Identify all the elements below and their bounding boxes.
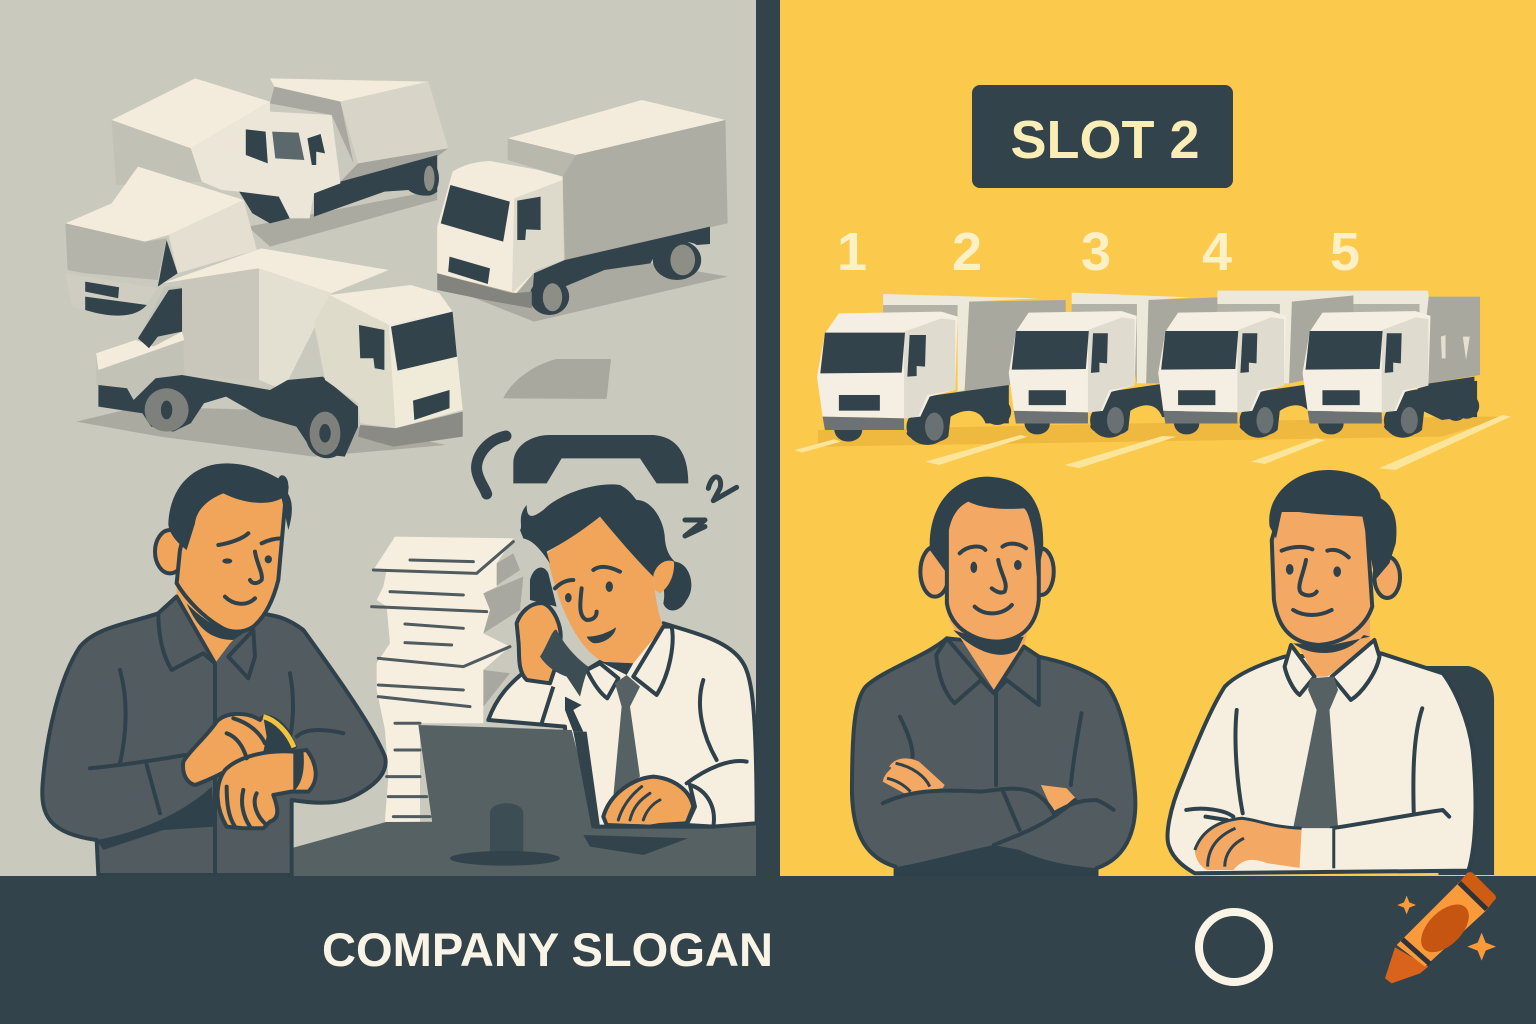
- label box: slot 2: [972, 85, 1233, 188]
- shirt folds: [90, 665, 343, 875]
- parking lines: [795, 415, 1511, 470]
- shirt: [852, 638, 1135, 875]
- face: [947, 497, 1039, 642]
- neck: [949, 620, 1030, 693]
- slot numbers 1 to 5: 4: [1202, 222, 1232, 282]
- panel: chaotic side background: [0, 0, 756, 876]
- upper hand: [183, 714, 295, 785]
- panel: organised side background: [780, 0, 1536, 876]
- neck: [1289, 607, 1370, 677]
- hand holding phone: [517, 603, 561, 683]
- shirt: [1168, 653, 1476, 873]
- slot numbers 1 to 5: 2: [952, 222, 982, 282]
- shirt: [488, 623, 757, 827]
- slot numbers 1 to 5: 1: [837, 222, 867, 282]
- office chair: [1426, 666, 1494, 875]
- facial features: [218, 533, 282, 604]
- shirt folds: [1186, 708, 1449, 828]
- ear: [155, 530, 185, 573]
- watch: [263, 717, 295, 752]
- truck 3: [1158, 291, 1354, 438]
- slot numbers 1 to 5: 5: [1330, 222, 1360, 282]
- hair: [1269, 470, 1396, 580]
- icon: telephone handset: [513, 435, 688, 483]
- man with crossed arms: [852, 477, 1135, 875]
- computer monitor: [418, 725, 688, 866]
- company slogan: COMPANY SLOGAN: [322, 923, 773, 976]
- face: [177, 487, 287, 632]
- shirt folds: [900, 693, 1082, 785]
- truck: back left: [112, 78, 448, 247]
- man checking his watch: [42, 463, 386, 875]
- truck shadow: [818, 417, 1507, 447]
- panel divider: [756, 0, 780, 876]
- truck: front centre: [76, 248, 463, 458]
- man in shirt and tie: [1168, 470, 1476, 873]
- face: [1272, 510, 1372, 645]
- crossed arms: [883, 789, 1114, 845]
- icon: orange crayon with sparkles: [1385, 872, 1496, 983]
- tie: [1293, 677, 1338, 828]
- truck 2: [1009, 293, 1217, 438]
- hands: [883, 758, 945, 793]
- facial features: [1282, 547, 1349, 615]
- truck 4: [1303, 291, 1480, 438]
- neck: [177, 577, 263, 663]
- ears: [920, 547, 949, 597]
- lower hand: [218, 750, 316, 828]
- label box: slot 2: SLOT 2: [1010, 110, 1200, 170]
- truck: far left: [65, 167, 257, 320]
- hair: [520, 484, 691, 610]
- face: [547, 517, 663, 663]
- desk: [292, 820, 756, 876]
- hair: [168, 463, 292, 550]
- icon: circle logo: [1199, 912, 1269, 982]
- illustration: disorganised trucks: [65, 78, 728, 458]
- shirt folds: [687, 680, 747, 783]
- hair behind: [530, 568, 557, 607]
- ear: [1374, 557, 1400, 598]
- facial features: [960, 544, 1026, 613]
- man on the phone icons and paper stack: [372, 435, 737, 840]
- slot numbers 1 to 5: 3: [1081, 222, 1111, 282]
- icon: phone cord: [477, 436, 506, 494]
- collar: [1285, 640, 1380, 700]
- row of parked trucks: [795, 291, 1511, 470]
- hand: [1195, 818, 1302, 870]
- facial features: [555, 567, 620, 620]
- footer bar: [0, 876, 1536, 1024]
- truck 1: [817, 294, 1066, 445]
- cuff: [1300, 828, 1334, 868]
- collar: [158, 597, 255, 678]
- hair: [930, 477, 1043, 577]
- hand on keyboard: [603, 777, 693, 827]
- ground shadow patch: [503, 359, 611, 399]
- icon: stress marks: [685, 477, 737, 536]
- truck: back right: [437, 100, 728, 322]
- man on the phone: [418, 484, 757, 866]
- slot numbers 1 to 5: [837, 222, 1360, 282]
- collar: [936, 638, 1039, 705]
- ear: [653, 561, 674, 593]
- collar and tie: [587, 627, 673, 698]
- stack of papers: [372, 537, 523, 840]
